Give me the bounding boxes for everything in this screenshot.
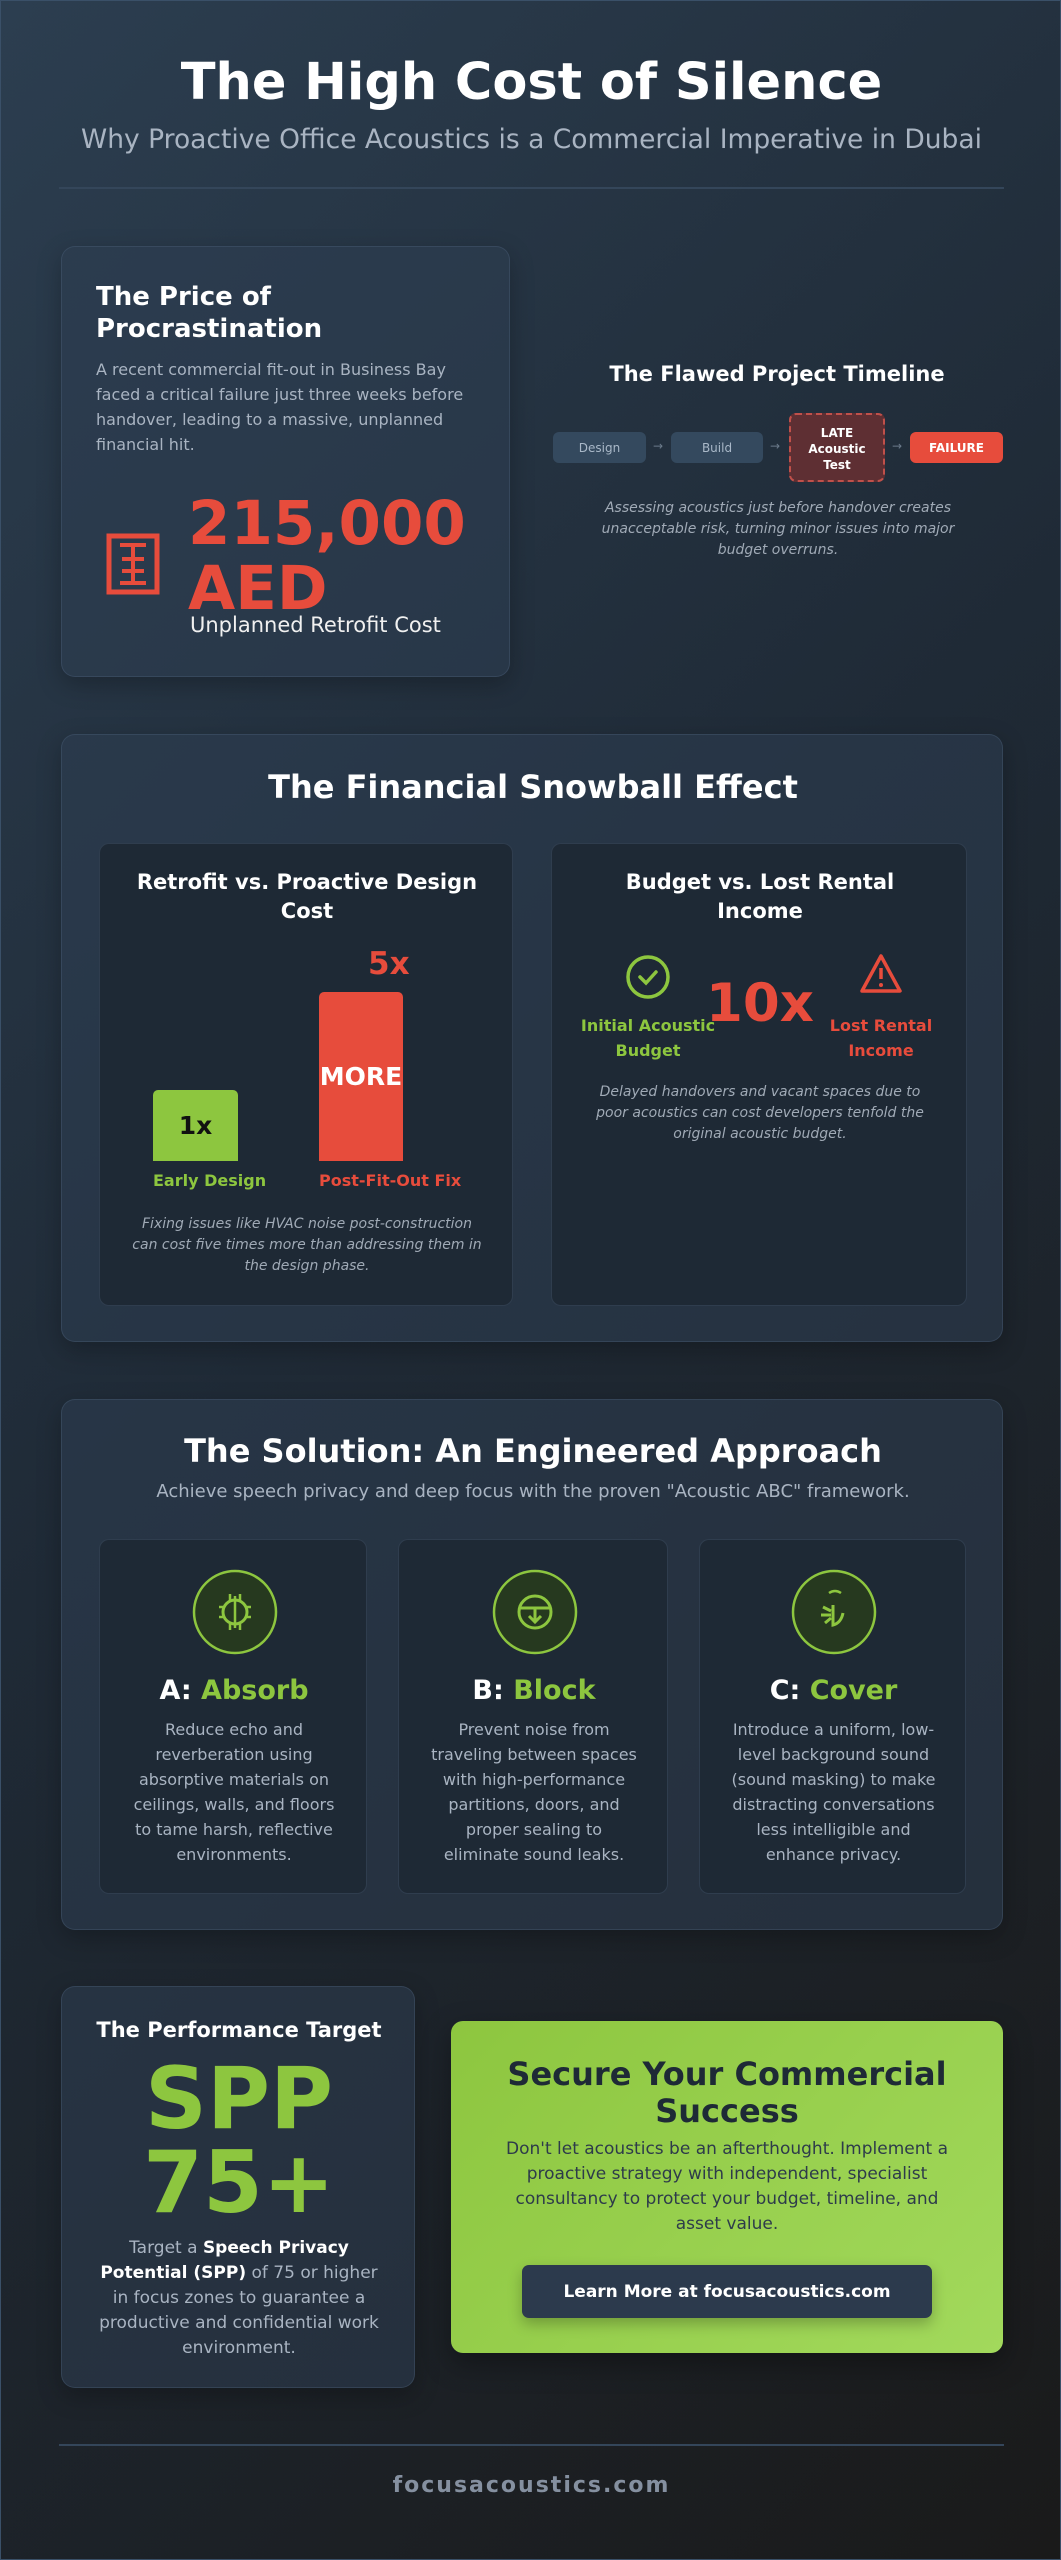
stat: 215,000 AED (188, 488, 466, 624)
button: Learn More at focusacoustics.com (563, 2282, 891, 2302)
card: cover (699, 1539, 966, 1894)
card: absorb: A: Absorb (159, 1675, 309, 1706)
stat: SPP 75+ (143, 2049, 335, 2233)
timeline: Build (702, 440, 732, 454)
stat: 215,000 AED: 215,000 (188, 488, 466, 559)
heading: The Flawed Project Timeline (609, 362, 945, 386)
heading: The Financial Snowball Effect (268, 768, 798, 806)
panel: call to action (451, 2021, 1003, 2353)
stat: SPP 75+: SPP (145, 2049, 333, 2149)
panel: solution (61, 1399, 1003, 1930)
caption: Assessing acoustics just before handover creates unacceptable risk, turning minor issues into major budget overruns. (602, 500, 954, 558)
subheading: Achieve speech privacy and deep focus with the proven "Acoustic ABC" framework. (156, 1481, 910, 1502)
chart: budget vs lost rental: 10x (706, 973, 814, 1034)
stat: SPP 75+: 75+ (143, 2133, 335, 2233)
stat label: Unplanned Retrofit Cost (190, 613, 441, 637)
chart: retrofit vs proactive: Early Design (153, 1171, 266, 1190)
panel: performance target (61, 1986, 415, 2388)
chart: budget vs lost rental: Budget vs. Lost Rental (626, 870, 894, 894)
timeline: Test (823, 458, 851, 472)
heading: The Performance Target (96, 2018, 382, 2042)
chart: budget vs lost rental: Income (717, 899, 803, 923)
heading: The Price of (96, 282, 271, 312)
text block: A recent commercial fit-out in Business Bay faced a critical failure just three weeks before handover, leading to a massive, unplanned financial hit. (96, 360, 463, 454)
timeline: FAILURE (929, 440, 984, 454)
timeline: LATE (821, 426, 853, 440)
card: block: Prevent noise from traveling between spaces with high-performance partitions, doors, and proper sealing to eliminate sound leaks. (431, 1720, 637, 1864)
card: absorb (99, 1539, 367, 1894)
card: cover: Introduce a uniform, low-level background sound (sound masking) to make distracting conversations less intelligible and enhance privacy. (731, 1720, 936, 1864)
subtitle: Why Proactive Office Acoustics is a Commercial Imperative in Dubai (81, 124, 982, 155)
chart: retrofit vs proactive: MORE (320, 1062, 402, 1091)
chart: budget vs lost rental: Budget (616, 1041, 680, 1060)
icon: receipt (106, 534, 160, 594)
heading (96, 282, 322, 344)
chart: retrofit vs proactive: Retrofit vs. Proactive Design (137, 870, 477, 894)
card: absorb: Reduce echo and reverberation using absorptive materials on ceilings, walls, and floors to tame harsh, reflective environments. (134, 1720, 334, 1864)
card: cover: C: Cover (770, 1675, 897, 1706)
timeline: → (770, 439, 780, 453)
timeline: Acoustic (808, 442, 866, 456)
chart: retrofit vs proactive: Post-Fit-Out Fix (319, 1171, 461, 1190)
stat: 215,000 AED: AED (188, 553, 328, 624)
footer: focusacoustics.com (393, 2473, 670, 2498)
timeline: → (653, 439, 663, 453)
chart: budget vs lost rental (551, 843, 967, 1306)
panel: financial snowball (61, 734, 1003, 1342)
timeline (553, 413, 1003, 482)
heading (507, 2055, 947, 2130)
chart: retrofit vs proactive: Fixing issues like HVAC noise post-construction can cost five times more than addressing them in the design phase. (132, 1216, 482, 1274)
button (522, 2265, 932, 2318)
chart: retrofit vs proactive: Cost (281, 899, 333, 923)
heading: Success (655, 2092, 799, 2130)
panel: price of procrastination (61, 246, 510, 677)
heading: Procrastination (96, 314, 322, 344)
heading: The Solution: An Engineered Approach (184, 1432, 882, 1470)
chart: budget vs lost rental: Income (848, 1041, 914, 1060)
timeline: → (892, 439, 902, 453)
timeline: Design (579, 440, 620, 454)
text block: Target a Speech Privacy Potential (SPP) of 75 or higher in focus zones to guarantee a productive and confidential work environment. (99, 2238, 379, 2358)
card: block (398, 1539, 668, 1894)
chart: retrofit vs proactive (99, 843, 513, 1306)
chart: budget vs lost rental: Initial Acoustic (581, 1016, 715, 1035)
chart: budget vs lost rental: Delayed handovers and vacant spaces due to poor acoustics can cost developers tenfold the original acoustic budget. (596, 1084, 924, 1142)
chart: retrofit vs proactive: 5x (368, 946, 410, 982)
chart: retrofit vs proactive: 1x (179, 1111, 212, 1140)
heading: Secure Your Commercial (507, 2055, 947, 2093)
card: block: B: Block (472, 1675, 596, 1706)
chart: budget vs lost rental: Lost Rental (830, 1016, 932, 1035)
text block: Don't let acoustics be an afterthought. Implement a proactive strategy with independent, specialist consultancy to protect your budget, timeline, and asset value. (506, 2139, 948, 2234)
title: The High Cost of Silence (181, 53, 882, 112)
